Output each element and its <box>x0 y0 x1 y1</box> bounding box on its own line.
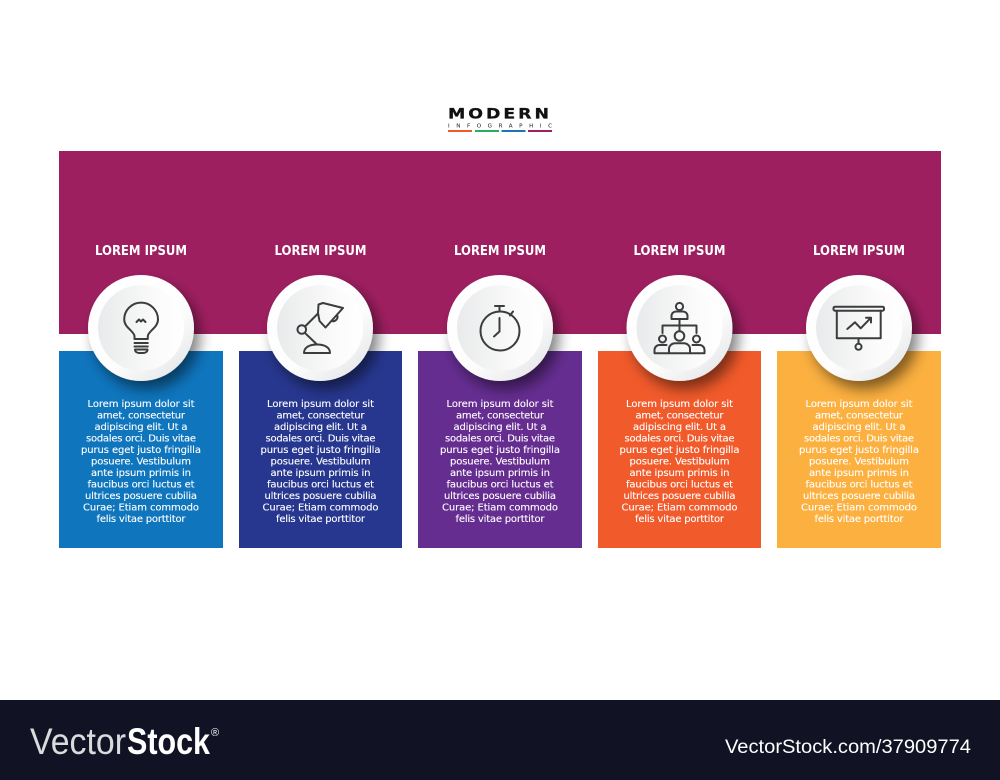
text block 2: posuere. Vestibulum <box>270 456 370 468</box>
text block 1: faucibus orci luctus et <box>88 480 195 490</box>
text block 5: posuere. Vestibulum <box>809 456 909 468</box>
footer logo: Vector <box>30 721 126 762</box>
text block 3: faucibus orci luctus et <box>446 480 554 490</box>
text block 4: felis vitae porttitor <box>635 514 725 525</box>
heading 5: LOREM IPSUM <box>813 244 905 259</box>
text block 2 <box>260 399 380 525</box>
heading 2: LOREM IPSUM <box>274 244 366 259</box>
footer bar <box>0 700 1000 780</box>
text block 3: adipiscing elit. Ut a <box>454 422 546 433</box>
panel: card 1 <box>59 351 223 548</box>
text block 1: purus eget justo fringilla <box>81 445 201 456</box>
text block 4: Curae; Etiam commodo <box>622 502 738 514</box>
footer logo: ® <box>211 727 219 739</box>
text block 5: Lorem ipsum dolor sit <box>806 399 913 410</box>
panel: card 4 <box>598 351 761 548</box>
footer logo <box>30 721 219 762</box>
icon: light bulb <box>124 303 158 353</box>
heading 3: LOREM IPSUM <box>454 244 546 259</box>
text block 3: sodales orci. Duis vitae <box>445 434 555 444</box>
text block 1: posuere. Vestibulum <box>91 456 191 468</box>
text block 5: ante ipsum primis in <box>809 468 909 479</box>
text block 4: adipiscing elit. Ut a <box>633 422 726 433</box>
text block 5 <box>799 399 919 525</box>
text block 4: ultrices posuere cubilia <box>624 491 736 502</box>
text block 5: Curae; Etiam commodo <box>801 502 917 514</box>
icon: desk lamp <box>298 303 343 353</box>
text block 2: adipiscing elit. Ut a <box>274 422 367 433</box>
logo title: MODERN <box>448 106 552 122</box>
icon: organisation chart <box>654 303 704 353</box>
panel: card 2 <box>239 351 402 548</box>
text block 3: posuere. Vestibulum <box>450 456 550 468</box>
text block 1: Lorem ipsum dolor sit <box>88 399 195 410</box>
circle badge 4 <box>626 275 732 381</box>
text block 2: ultrices posuere cubilia <box>264 491 376 502</box>
text block 4: purus eget justo fringilla <box>620 445 740 456</box>
logo subtitle: INFOGRAPHIC <box>448 124 552 130</box>
text block 1: sodales orci. Duis vitae <box>86 434 196 444</box>
text block 2: ante ipsum primis in <box>270 468 370 479</box>
circle badge 1 <box>88 275 194 381</box>
text block 3: ante ipsum primis in <box>450 468 550 479</box>
text block 1 <box>81 399 201 525</box>
circle badge 2 <box>267 275 373 381</box>
icon: presentation board <box>834 307 884 350</box>
text block 3: ultrices posuere cubilia <box>444 491 556 502</box>
text block 5: purus eget justo fringilla <box>799 445 919 456</box>
logo colour bars <box>448 130 552 132</box>
text block 3 <box>440 399 560 525</box>
panel: card 3 <box>418 351 582 548</box>
heading 1: LOREM IPSUM <box>95 244 187 259</box>
text block 3: purus eget justo fringilla <box>440 445 560 456</box>
text block 3: Lorem ipsum dolor sit <box>446 399 554 410</box>
text block 2: purus eget justo fringilla <box>260 445 380 456</box>
heading 4: LOREM IPSUM <box>634 244 726 259</box>
text block 5: sodales orci. Duis vitae <box>804 434 914 444</box>
text block 5: felis vitae porttitor <box>814 514 904 525</box>
text block 2: faucibus orci luctus et <box>267 480 374 490</box>
footer logo: Stock <box>127 721 210 762</box>
text block 5: amet, consectetur <box>815 410 904 422</box>
text block 2: felis vitae porttitor <box>276 514 366 525</box>
text block 4: posuere. Vestibulum <box>630 456 730 468</box>
text block 1: felis vitae porttitor <box>96 514 186 525</box>
text block 5: faucibus orci luctus et <box>806 480 913 490</box>
text block 1: amet, consectetur <box>97 410 186 422</box>
text block 4: ante ipsum primis in <box>630 468 730 479</box>
text block 4 <box>620 399 740 525</box>
text block 1: ante ipsum primis in <box>91 468 191 479</box>
text block 3: felis vitae porttitor <box>456 514 545 525</box>
text block 4: faucibus orci luctus et <box>626 480 733 490</box>
text block 2: Curae; Etiam commodo <box>262 502 378 514</box>
text block 1: ultrices posuere cubilia <box>85 491 197 502</box>
text block 4: Lorem ipsum dolor sit <box>626 399 733 410</box>
text block 5: ultrices posuere cubilia <box>803 491 915 502</box>
text block 2: Lorem ipsum dolor sit <box>267 399 374 410</box>
text block 1: adipiscing elit. Ut a <box>94 422 188 433</box>
text block 5: adipiscing elit. Ut a <box>812 422 906 433</box>
icon: stopwatch <box>480 306 520 350</box>
panel: card 5 <box>777 351 941 548</box>
circle badge 5 <box>806 275 912 381</box>
text block 2: amet, consectetur <box>276 410 365 422</box>
text block 3: amet, consectetur <box>456 410 545 422</box>
text block 4: amet, consectetur <box>636 410 724 422</box>
text block 4: sodales orci. Duis vitae <box>624 434 734 444</box>
footer image id: VectorStock.com/37909774 <box>725 736 971 758</box>
text block 3: Curae; Etiam commodo <box>442 502 558 514</box>
text block 1: Curae; Etiam commodo <box>83 502 199 514</box>
top magenta band <box>59 151 941 334</box>
text block 2: sodales orci. Duis vitae <box>266 434 376 444</box>
circle badge 3 <box>447 275 553 381</box>
logo <box>448 106 552 132</box>
